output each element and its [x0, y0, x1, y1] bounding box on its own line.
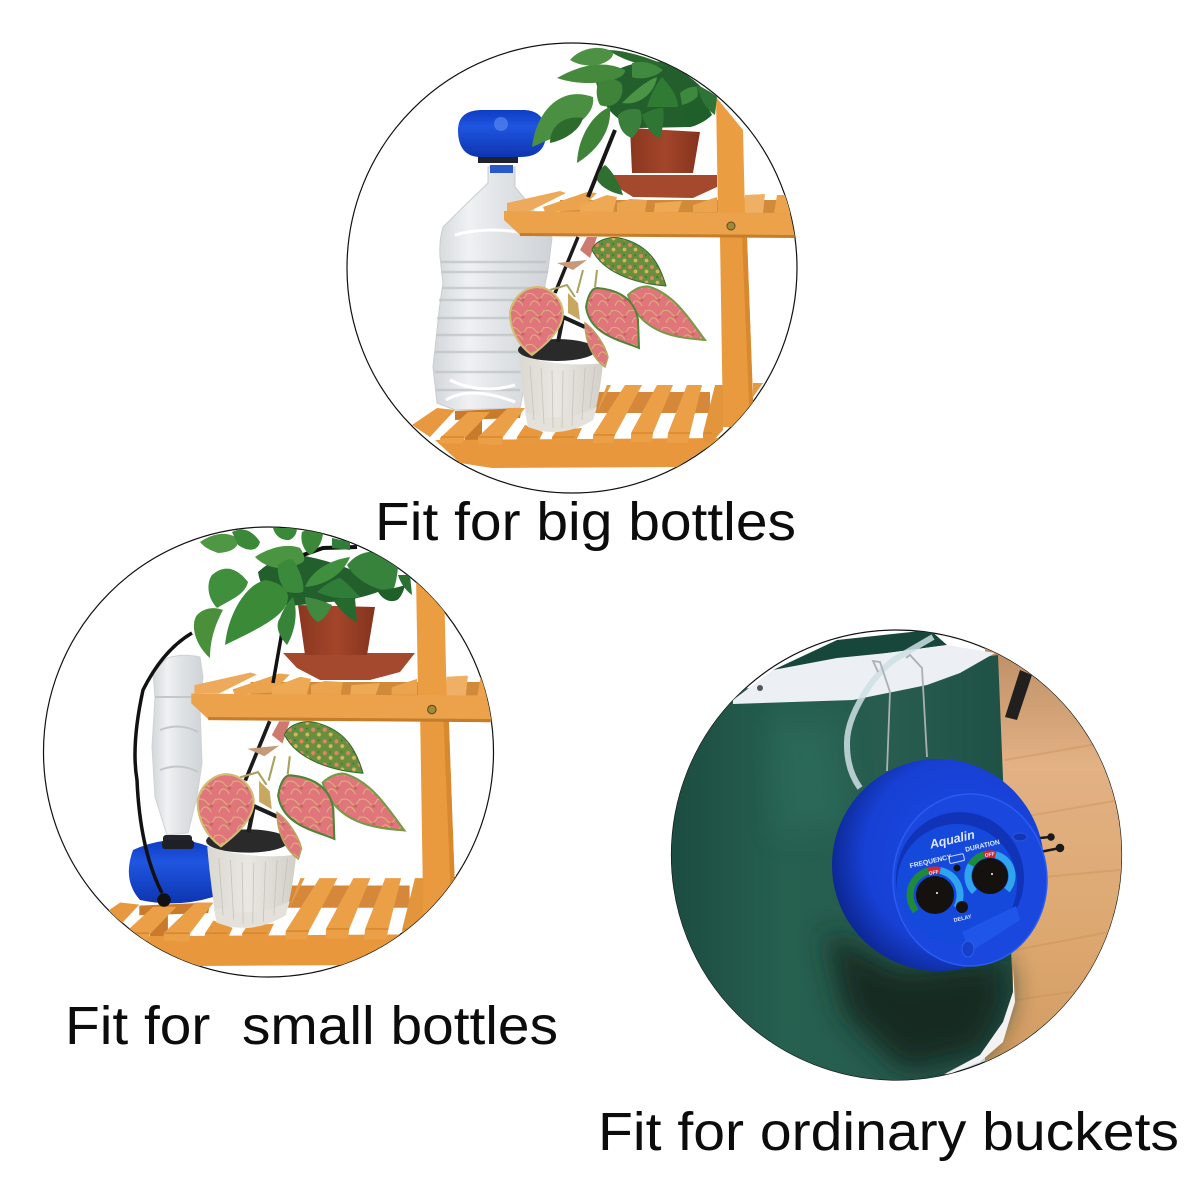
photo: controller hanging on bucket: [660, 630, 1125, 1085]
upper potted plant: [532, 48, 717, 198]
big water bottle: [433, 165, 552, 410]
logo and dial labels: Aqualin: [927, 827, 977, 852]
caption: big bottles: Fit for big bottles: [375, 492, 796, 552]
delay button: [954, 901, 971, 922]
caption: ordinary buckets: Fit for ordinary buckets: [598, 1102, 1179, 1162]
small water bottle: [152, 655, 203, 847]
clear tube and hanger wires: [847, 637, 933, 788]
photo: small bottle on plant shelf: [94, 528, 500, 966]
dial OFF labels: OFF: [928, 869, 939, 877]
blue controller under bottle: [129, 840, 214, 903]
wooden plant shelf: [94, 573, 500, 966]
blue controller on bottle: [458, 110, 546, 163]
delay button: DELAY: [953, 914, 973, 924]
blue controller: [832, 759, 1047, 971]
dial OFF labels: OFF: [984, 851, 995, 859]
battery icon and LED: [949, 854, 965, 872]
rear pegs: [1040, 834, 1063, 852]
panel: big bottle circle: [347, 43, 797, 493]
black drip tube: [135, 632, 282, 905]
dial OFF labels: [928, 851, 995, 877]
frequency dial: [910, 870, 960, 913]
lower potted aglaonema: [198, 721, 404, 928]
white bucket rim: [733, 645, 995, 704]
wooden plant shelf: [412, 97, 795, 468]
lower potted aglaonema: [510, 237, 705, 432]
wooden floor: [985, 648, 1122, 1062]
panel: small bottle circle: [44, 527, 500, 977]
logo and dial labels: FREQUENCY: [909, 854, 953, 870]
photo: big bottle on plant shelf: [412, 48, 795, 468]
logo and dial labels: [910, 831, 1000, 868]
panel: ordinary bucket circle: [660, 630, 1125, 1085]
upper potted plant: [194, 528, 415, 680]
caption: small bottles: Fit for small bottles: [65, 996, 558, 1056]
logo and dial labels: DURATION: [965, 839, 1001, 854]
duration dial: [968, 854, 1012, 893]
green bucket fabric: [660, 630, 1015, 1085]
